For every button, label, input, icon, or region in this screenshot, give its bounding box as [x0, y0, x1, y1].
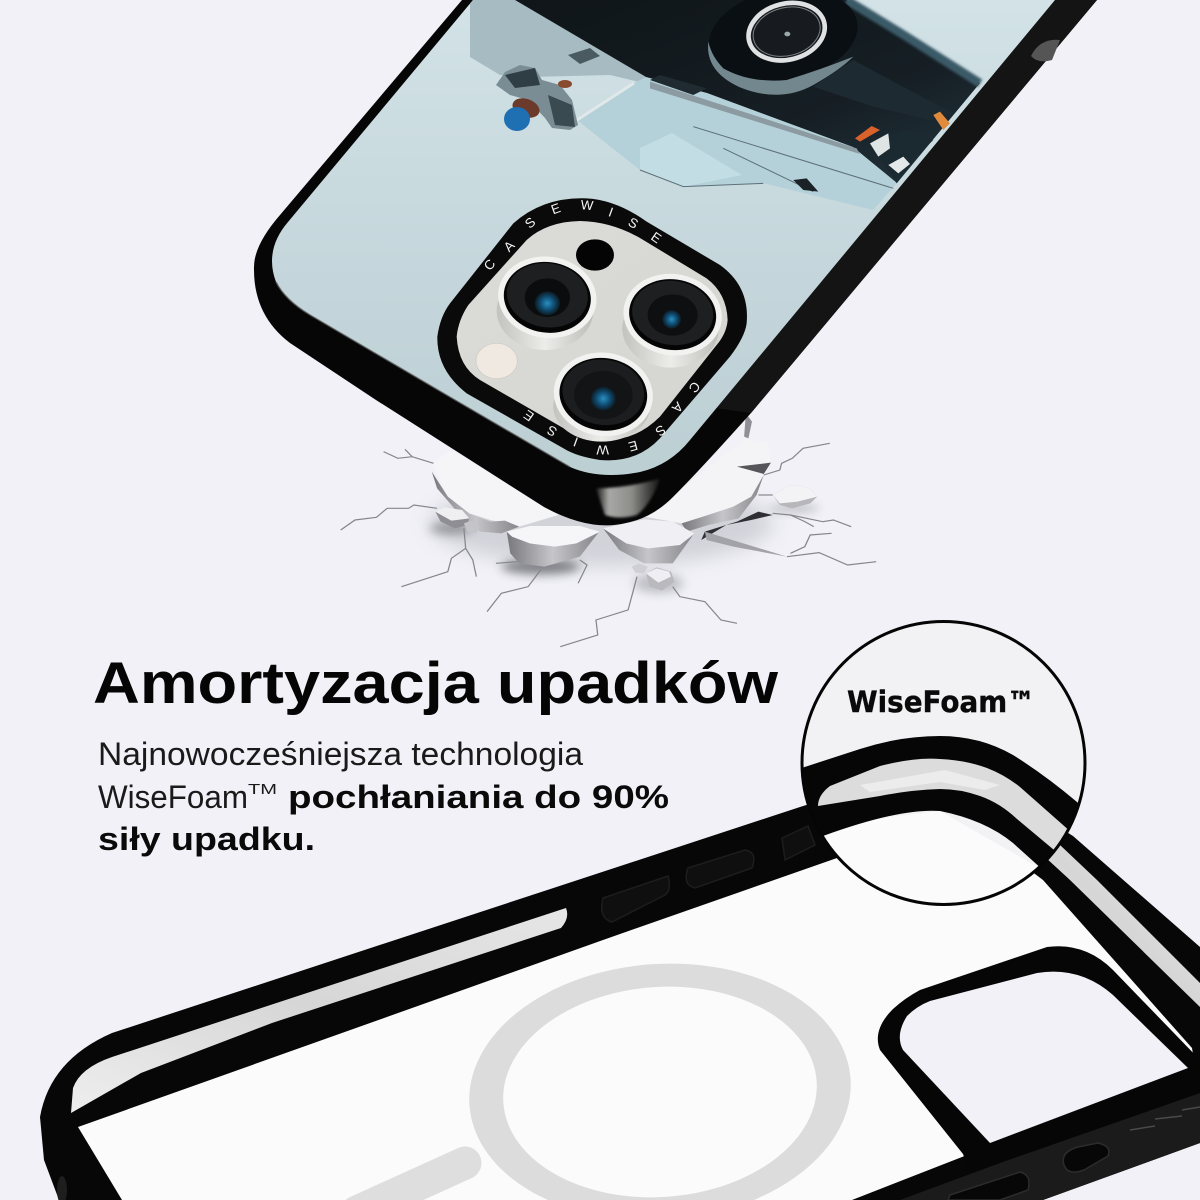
- brand text: CASEWISE: W: [596, 443, 609, 458]
- lower frame lighter strip: [900, 1093, 1200, 1200]
- right foam slit: [1045, 845, 1200, 1007]
- magnetic ring: [461, 951, 859, 1200]
- label WiseFoam: WiseFoam™: [847, 685, 1035, 719]
- brand text: CASEWISE: E: [521, 407, 537, 424]
- circle outline: [802, 622, 1085, 904]
- brand text: CASEWISE: E: [627, 438, 639, 454]
- body text: TM: [248, 781, 277, 798]
- brand text: CASEWISE: C: [481, 256, 499, 273]
- heading: Amortyzacja upadków: [93, 651, 779, 716]
- body text: [98, 736, 669, 857]
- brand text: CASEWISE: E: [549, 200, 563, 217]
- car pale upper panel: [470, 0, 646, 82]
- cracked floor impact: [341, 413, 876, 647]
- body text: pochłaniania do 90%: [288, 779, 669, 815]
- body text: Najnowocześniejsza technologia: [98, 736, 583, 772]
- camera cutout frame: [878, 946, 1200, 1200]
- brand text: CASEWISE: W: [580, 197, 594, 213]
- lens 1: [493, 250, 602, 350]
- circle background: [802, 622, 1085, 904]
- body text: WiseFoam: [98, 779, 248, 815]
- brand text: CASEWISE: S: [653, 422, 669, 439]
- lens 2: [618, 268, 727, 368]
- magnified foam strip: [818, 758, 1068, 850]
- brand text: CASEWISE: S: [626, 214, 641, 232]
- car details: [640, 0, 980, 192]
- brand text: CASEWISE: A: [501, 238, 518, 255]
- foam shine: [860, 770, 1000, 792]
- brand text: CASEWISE: E: [648, 229, 664, 246]
- side buttons: [602, 826, 815, 922]
- lens 3: [548, 346, 658, 442]
- case body: [254, 0, 1097, 525]
- lower right streaks: [1130, 1107, 1200, 1130]
- right side edge: [708, 0, 1097, 413]
- brand text: CASEWISE: A: [669, 399, 686, 416]
- magnified edge: [804, 736, 1078, 903]
- camera cutout opening: [900, 972, 1188, 1143]
- phone case interior view: [40, 760, 1200, 1200]
- mirror: [568, 48, 600, 64]
- brand text: CASEWISE: I: [607, 204, 615, 220]
- brand text: CASEWISE: I: [571, 434, 580, 450]
- phone case top: [254, 0, 1097, 525]
- camera plate: [457, 221, 728, 440]
- mute switch: [1063, 1143, 1109, 1172]
- black frame: [40, 760, 1200, 1200]
- clear back interior: [78, 810, 1195, 1200]
- flash: [476, 343, 517, 379]
- bump frame: [437, 198, 747, 460]
- car dark body: [515, 0, 980, 183]
- camera bump: [437, 197, 747, 460]
- magnetic stem: [357, 1163, 465, 1200]
- magnified black frame: [804, 736, 1078, 866]
- windshield frame arm: [577, 83, 634, 120]
- glass edge highlight: [276, 282, 570, 467]
- person figure: [496, 65, 578, 131]
- magnified clear interior: [824, 811, 1037, 903]
- brand text: CASEWISE: [481, 197, 703, 458]
- bottom edge reflection: [596, 478, 660, 517]
- bottom port: [948, 1172, 1029, 1200]
- brand text: CASEWISE: S: [522, 214, 538, 231]
- charging opening: [57, 1176, 67, 1200]
- car windshield: [577, 77, 897, 210]
- windshield lighter panel: [640, 133, 742, 187]
- left foam slit: [71, 908, 567, 1113]
- magnifier circle: WiseFoam detail: [800, 620, 1086, 906]
- brand text: CASEWISE: S: [544, 422, 560, 440]
- microphone hole: [576, 239, 614, 271]
- car photo: [470, 0, 980, 210]
- body text: siły upadku.: [98, 821, 315, 857]
- back glass: [272, 0, 1055, 475]
- brand text: CASEWISE: C: [685, 379, 703, 396]
- side button: [1031, 40, 1060, 61]
